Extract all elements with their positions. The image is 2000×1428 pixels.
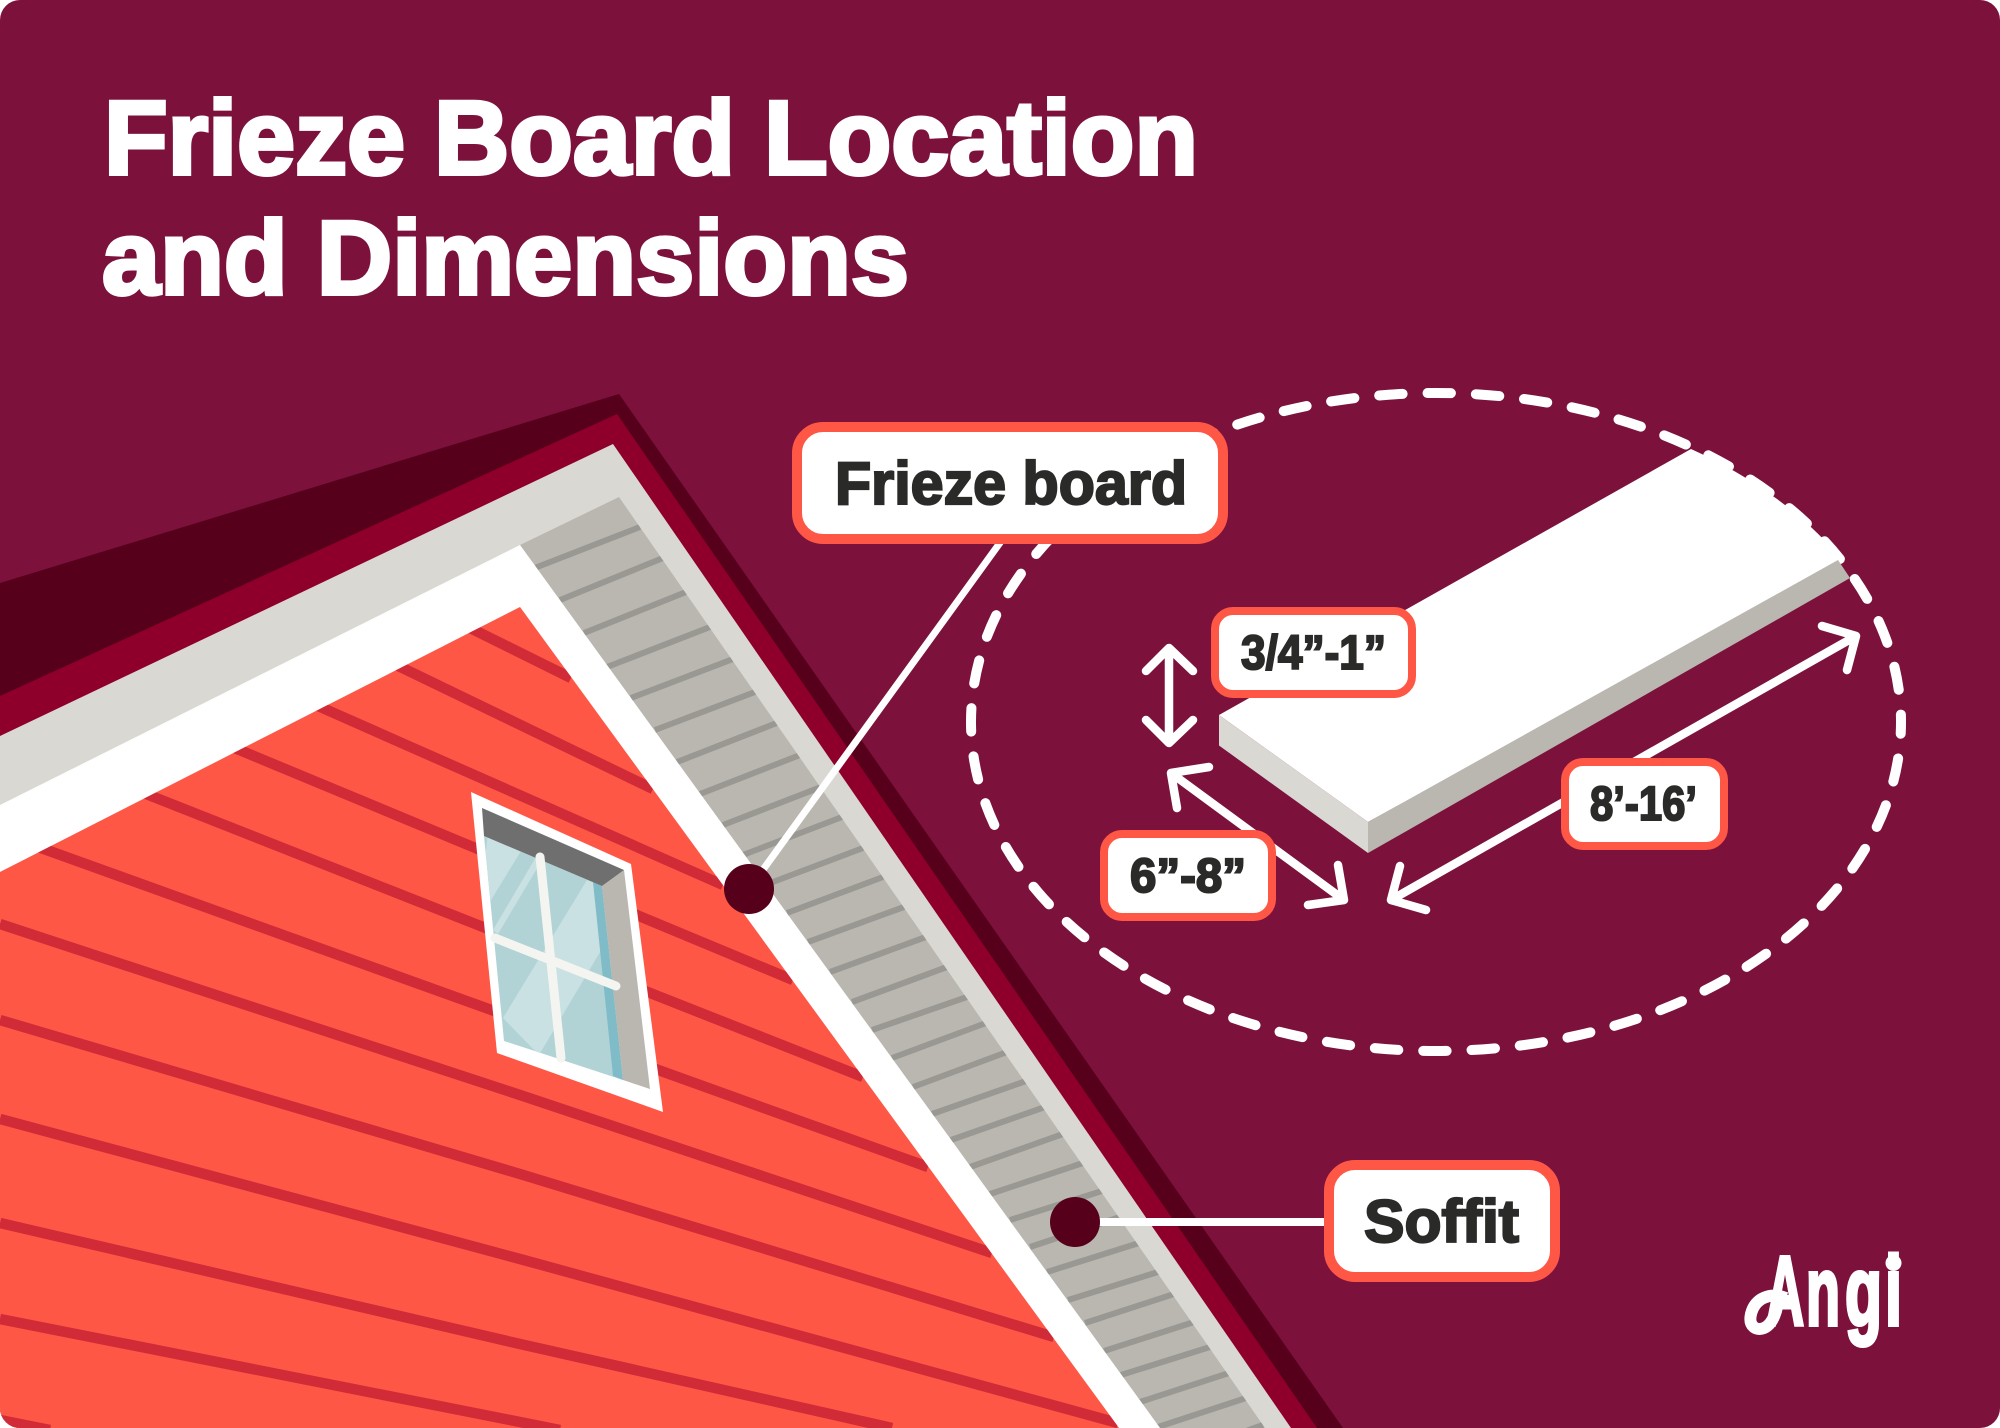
label: thickness: 3/4”-1”: [1241, 627, 1386, 680]
logo: Angi: n: [1806, 1236, 1840, 1346]
window: [471, 792, 663, 1112]
arrow: width: [1171, 767, 1344, 905]
logo: Angi: A: [1766, 1236, 1804, 1346]
arrow: length: [1391, 626, 1856, 910]
frieze board: white trim: [0, 545, 1160, 1428]
marker: soffit dot: [1050, 1197, 1100, 1247]
arrow: thickness: [1146, 648, 1193, 743]
logo: Angi: [1750, 1236, 1902, 1346]
dashed ellipse callout: [971, 393, 1901, 1051]
logo: Angi: i: [1885, 1236, 1902, 1346]
illustration: frieze board piece: [1219, 449, 1850, 853]
panel: soffit with slats: [520, 497, 1265, 1428]
title: and Dimensions: [102, 200, 909, 317]
trim: light gray rake board: [0, 444, 1291, 1428]
label: frieze board: [797, 427, 1223, 539]
roof edge: dark shadow band: [0, 394, 1343, 1428]
label: soffit: [1329, 1165, 1555, 1277]
label: width: 6”-8”: [1130, 850, 1246, 903]
label: length: [1565, 762, 1724, 846]
label: length: 8’-16’: [1590, 778, 1697, 831]
label: soffit: Soffit: [1364, 1188, 1519, 1255]
label: thickness: [1215, 611, 1412, 694]
leader: soffit: [1050, 1197, 1330, 1247]
title: [102, 80, 1198, 317]
title: Frieze Board Location: [104, 80, 1198, 197]
leader: frieze board: [724, 540, 1002, 914]
panel: red siding: [0, 607, 1119, 1428]
logo: Angi: g: [1845, 1236, 1882, 1346]
label: width: [1104, 834, 1272, 917]
marker: frieze board dot: [724, 864, 774, 914]
roof edge: crimson fascia: [0, 414, 1317, 1428]
illustration: house gable: [0, 394, 1343, 1428]
label: frieze board: Frieze board: [835, 450, 1187, 517]
